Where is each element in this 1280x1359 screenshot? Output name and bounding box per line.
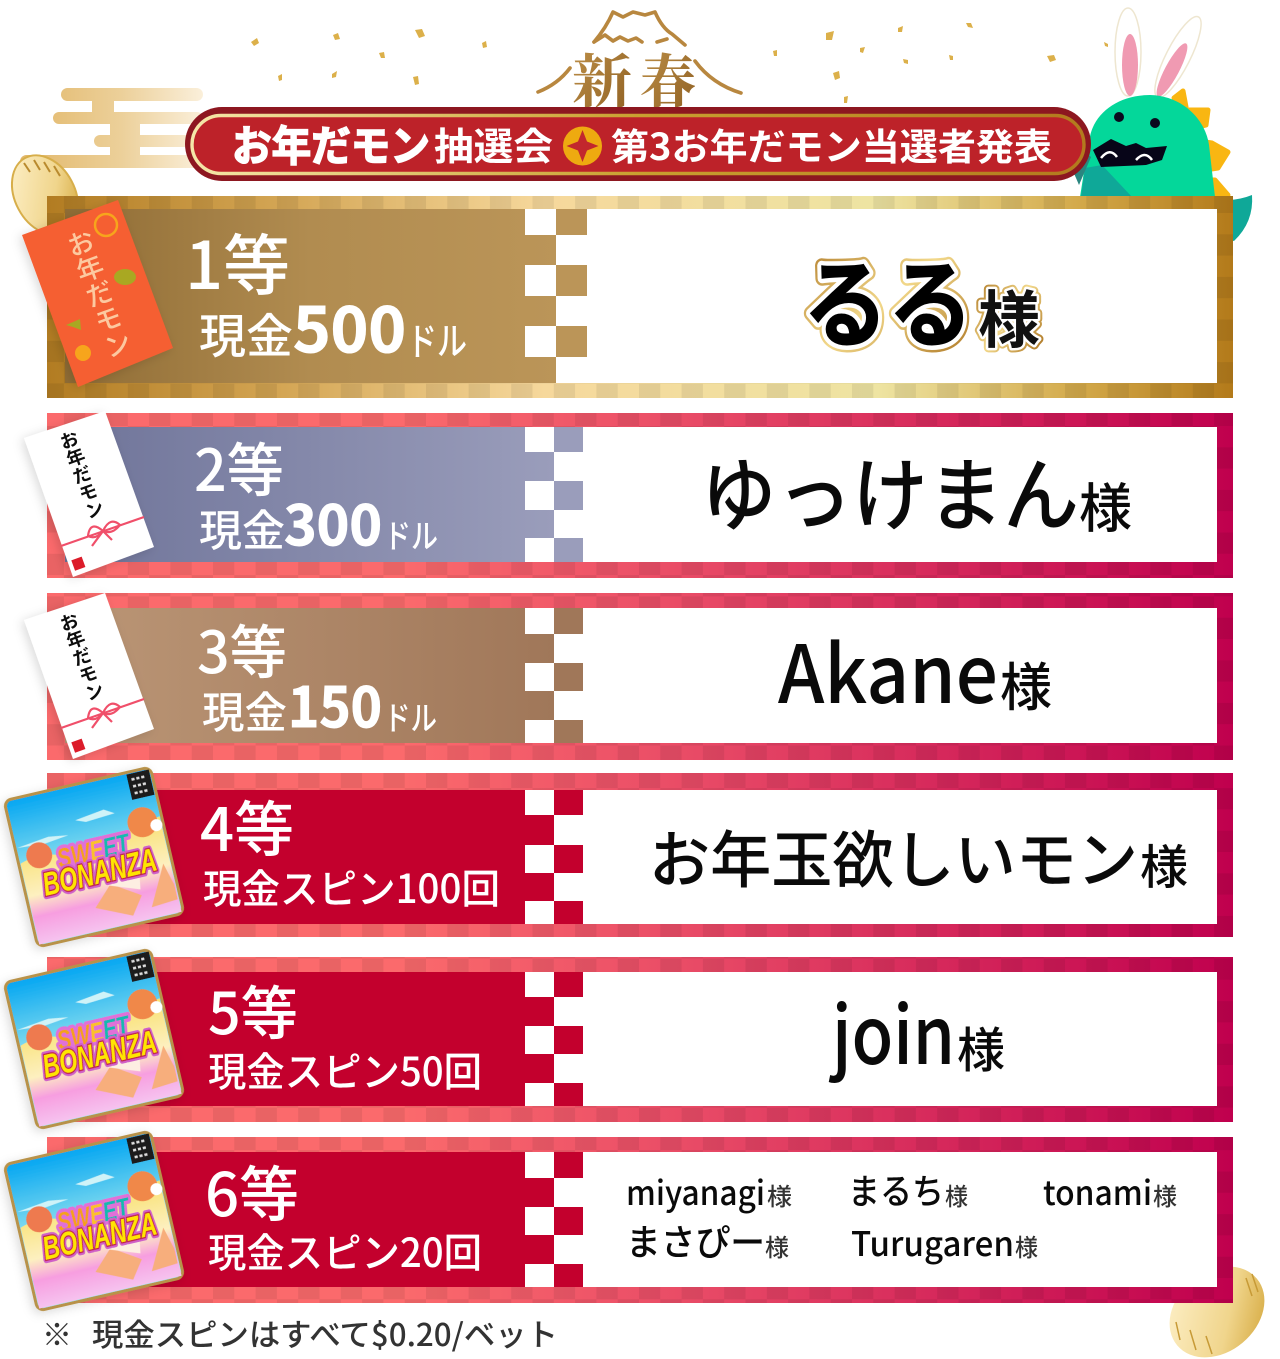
icon: Sweet Bonanza game card	[4, 767, 184, 947]
icon: Sweet Bonanza game card: BONANZA	[39, 842, 160, 903]
mascot: dinosaur with rabbit ears	[1064, 8, 1252, 241]
winners list: tonami	[1043, 1166, 1152, 1215]
icon: orange envelope	[22, 200, 173, 387]
text: 第3お年だモン当選者発表: 第3お年だモン当選者発表	[611, 117, 1052, 171]
winners list: 様	[765, 1228, 789, 1263]
icon: dinosaur face	[1093, 112, 1167, 167]
text: 現金150ドル: ドル	[384, 692, 437, 740]
text: 2等: 2等	[194, 424, 284, 508]
right gold koban coin	[1151, 1248, 1280, 1359]
text: 抽選会: 抽選会	[434, 116, 553, 171]
red checker frame	[47, 413, 1233, 578]
icon: Sweet Bonanza game card	[4, 1131, 184, 1311]
text: 現金300ドル: 300	[284, 481, 382, 561]
icon: orange envelope: お年だモン	[58, 223, 140, 364]
icon: Sweet Bonanza game card: BONANZA	[39, 1206, 160, 1267]
gold cloud decoration	[20, 88, 204, 168]
text: 現金500ドル: 500	[293, 280, 406, 370]
winners list: 様	[1015, 1228, 1038, 1263]
winner: るる様: るる	[803, 228, 973, 367]
icon: Sweet Bonanza game card	[4, 949, 184, 1129]
winner: るる様: 様	[978, 270, 1040, 360]
banner heading	[185, 107, 1091, 181]
logo: お年だモン: お年だモン	[232, 113, 430, 174]
text: 現金300ドル: ドル	[384, 510, 438, 558]
red checker frame	[47, 1137, 1233, 1303]
text: 6等: 6等	[205, 1147, 299, 1234]
winners list: 様	[767, 1177, 792, 1212]
prize panel with checker edge	[65, 209, 587, 383]
icon: Sweet Bonanza game card: SWEET	[54, 1010, 134, 1056]
row: 6th prize	[4, 1131, 1233, 1311]
icon: Mt. Fuji outline	[538, 12, 741, 93]
icon: dinosaur arm	[1064, 143, 1091, 185]
row: 4th prize	[4, 767, 1233, 947]
prize panel with checker edge	[65, 608, 583, 743]
winners list: 様	[945, 1177, 968, 1212]
text: 現金300ドル: 現金	[199, 497, 285, 559]
winner: るる様: るる	[803, 228, 973, 367]
heading: 新春	[572, 35, 696, 119]
row: 3rd prize	[24, 593, 1233, 760]
footnote: 現金スピンはすべて$0.20/ベット	[92, 1310, 558, 1355]
winner: お年玉欲しいモン様: 様	[1140, 829, 1188, 898]
winner: るる様: 様	[978, 270, 1040, 360]
red checker frame	[47, 957, 1233, 1122]
icon: gold coin	[563, 126, 602, 166]
icon: Sweet Bonanza game card: SWEET	[54, 828, 134, 874]
text: 3等: 3等	[197, 606, 287, 690]
icon: white envelope	[24, 593, 154, 759]
winners list: 様	[1153, 1177, 1177, 1212]
red checker frame	[47, 773, 1233, 937]
text: 現金500ドル: 現金	[199, 298, 293, 367]
title emblem: Mt. Fuji and 新春	[538, 12, 741, 119]
prize panel with checker edge	[65, 427, 583, 562]
winner: join様: join	[829, 972, 955, 1088]
text: 5等: 5等	[208, 967, 298, 1051]
icon: Sweet Bonanza game card: SWEET	[54, 1192, 134, 1238]
footnote: ※	[42, 1310, 72, 1355]
icon: Sweet Bonanza game card: SWEET	[54, 1010, 134, 1056]
icon: white envelope: お年だモン	[54, 427, 110, 522]
heading: 新春: 新	[572, 35, 632, 119]
icon: dinosaur body	[1080, 95, 1215, 197]
icon: white envelope	[24, 411, 154, 577]
winners list	[626, 1164, 1177, 1266]
text: 1等: 1等	[185, 213, 290, 309]
gold checker frame	[47, 196, 1233, 398]
icon: Sweet Bonanza game card: SWEET	[54, 1192, 134, 1238]
winners list: まさぴー	[626, 1214, 765, 1266]
text: 現金150ドル: 150	[288, 663, 382, 743]
text: 現金500ドル: ドル	[407, 311, 467, 366]
gold confetti	[251, 23, 1108, 103]
winner: join様: 様	[957, 1011, 1005, 1081]
text: 4等: 4等	[200, 782, 294, 869]
winner: ゆっけまん様: ゆっけまん	[701, 432, 1079, 548]
winners list: まるち	[848, 1164, 944, 1215]
prize panel with checker edge	[65, 790, 583, 924]
prize panel with checker edge	[65, 1152, 583, 1287]
row: 2nd prize	[24, 411, 1233, 578]
icon: Sweet Bonanza game card: BONANZA	[39, 1206, 160, 1267]
text: 現金500ドル	[199, 280, 467, 370]
prize panel with checker edge	[65, 972, 583, 1106]
text: 現金300ドル	[199, 481, 438, 561]
icon: white envelope: お年だモン	[54, 609, 110, 704]
text: 現金スピン50回: 現金スピン50回	[208, 1040, 482, 1098]
winner: るる様: るる	[803, 228, 973, 367]
text: 現金スピン100回: 現金スピン100回	[203, 857, 500, 915]
icon: dinosaur tail	[1230, 195, 1252, 241]
heading: 新春: 春	[640, 35, 696, 119]
row: 1st prize	[22, 196, 1233, 398]
text: 現金150ドル: 現金	[202, 679, 287, 741]
icon: Sweet Bonanza game card: BONANZA	[39, 1024, 160, 1085]
icon: Sweet Bonanza game card: SWEET	[54, 828, 134, 874]
text: 現金150ドル	[202, 663, 437, 743]
text: 現金スピン20回: 現金スピン20回	[208, 1221, 482, 1279]
row: 5th prize	[4, 949, 1233, 1129]
winner: Akane様: Akane	[778, 611, 998, 727]
winners list: miyanagi	[626, 1166, 765, 1215]
winner: お年玉欲しいモン様: お年玉欲しいモン	[649, 810, 1138, 900]
icon: rabbit ears	[1115, 8, 1209, 103]
left gold koban coin	[0, 144, 91, 246]
winners list: Turugaren	[851, 1217, 1014, 1266]
icon: yellow spikes	[1174, 91, 1228, 195]
winner: ゆっけまん様: 様	[1079, 467, 1132, 543]
icon: Sweet Bonanza game card: BONANZA	[39, 1024, 160, 1085]
icon: Sweet Bonanza game card: BONANZA	[39, 842, 160, 903]
red checker frame	[47, 593, 1233, 760]
winner: Akane様: 様	[1000, 646, 1052, 721]
